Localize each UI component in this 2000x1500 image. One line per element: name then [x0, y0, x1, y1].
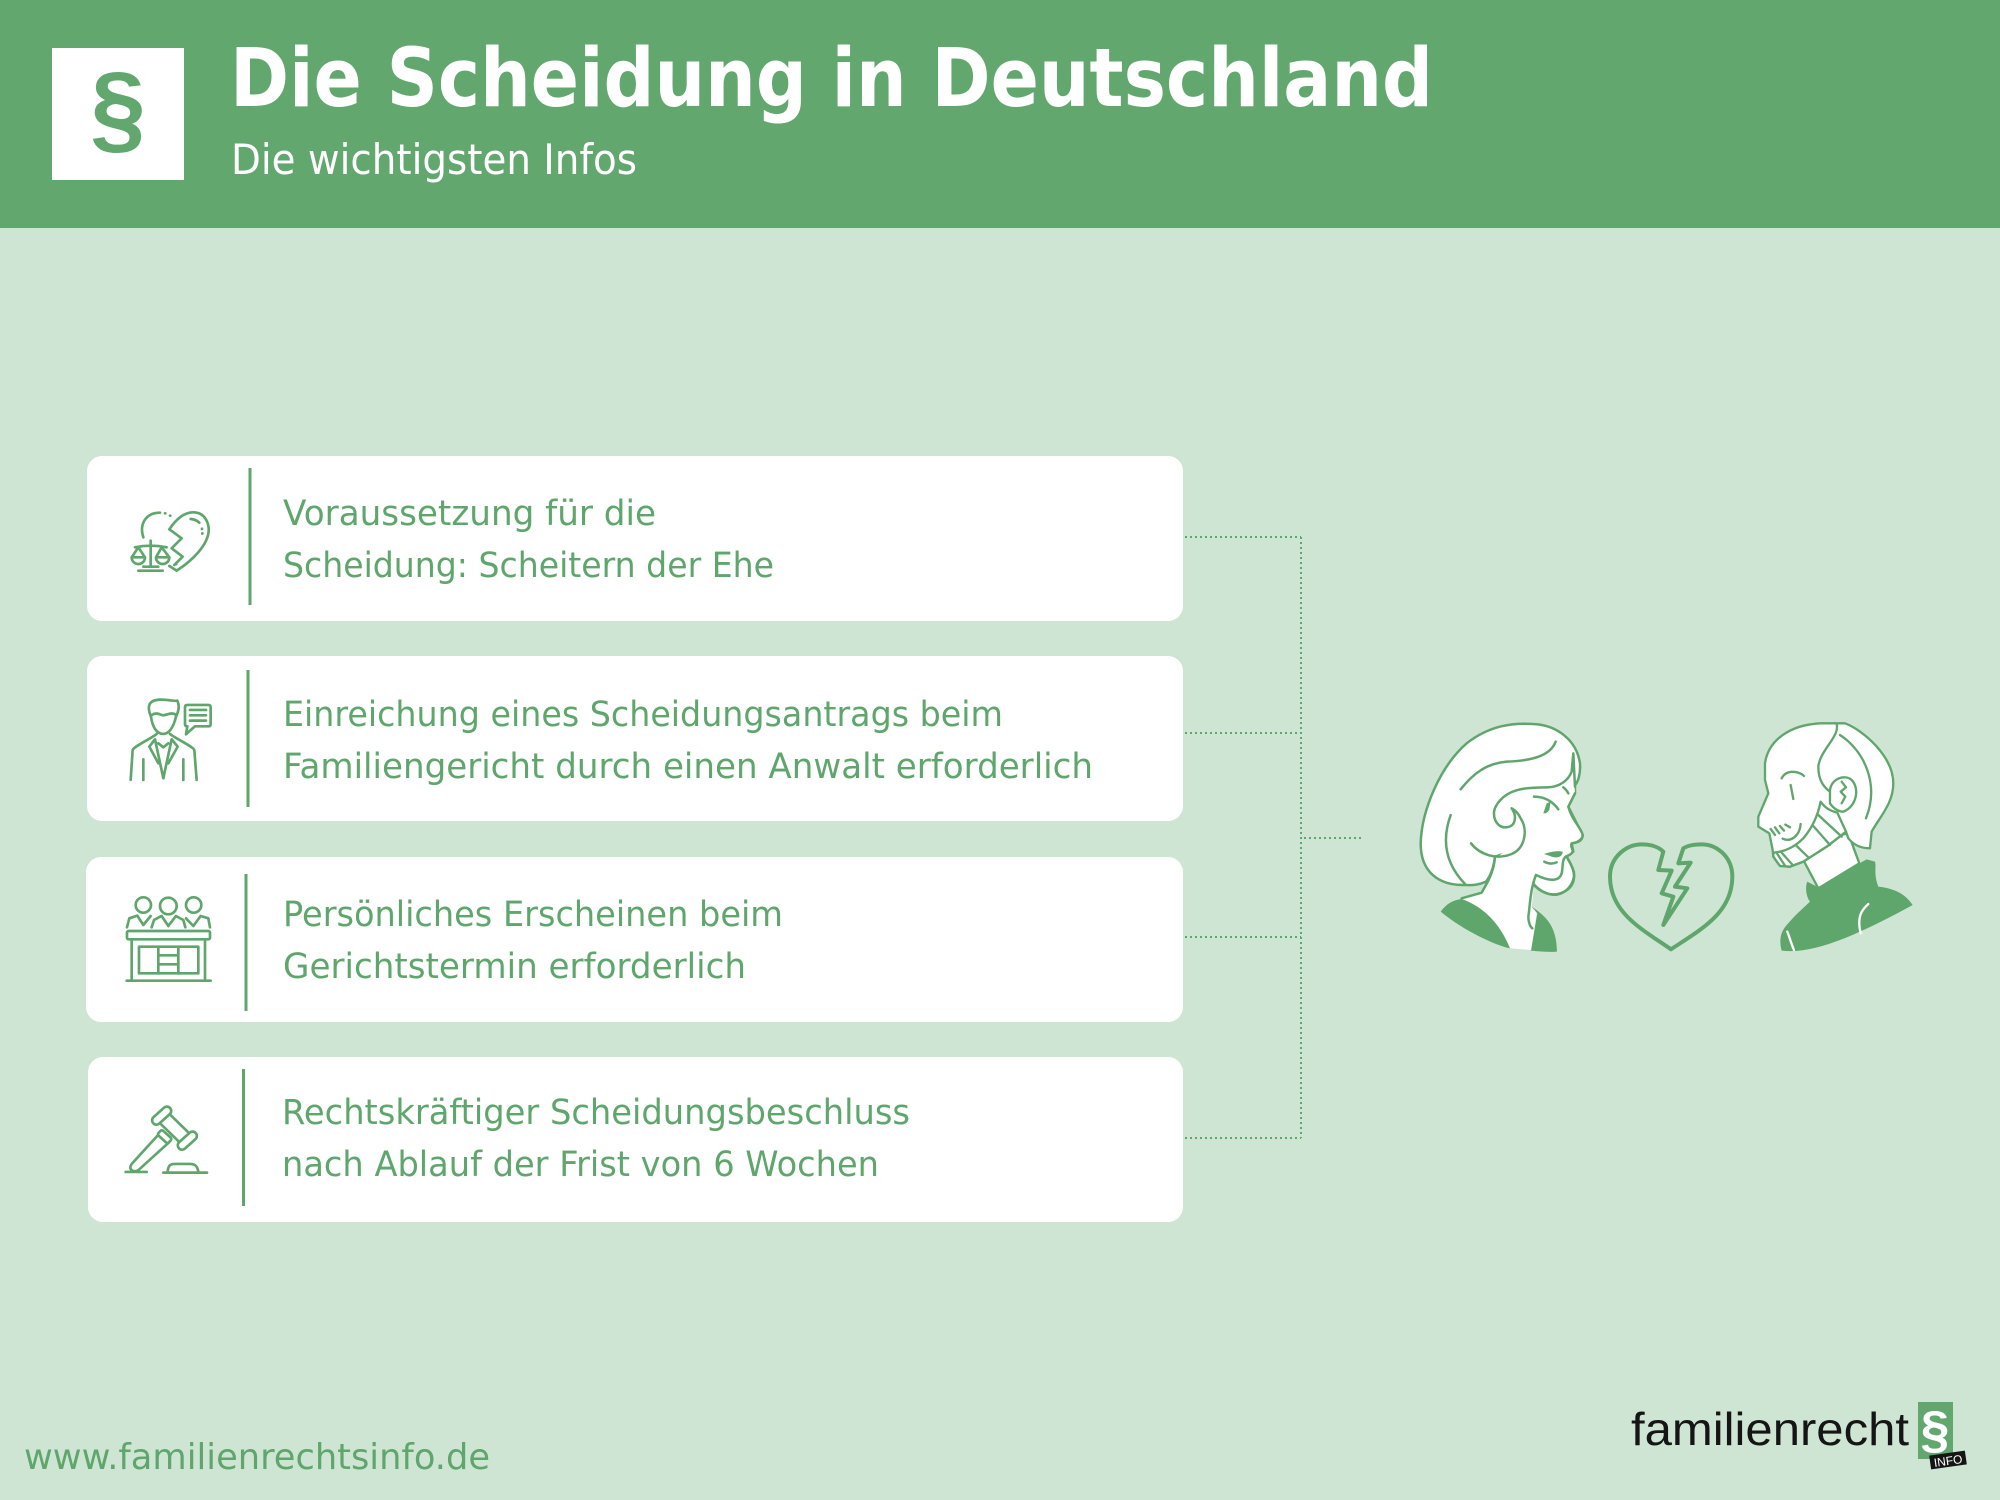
icon: broken heart [1610, 844, 1732, 949]
website url: www.familienrechtsinfo.de [24, 1437, 490, 1478]
text: final decree [282, 1093, 910, 1185]
icon: broken heart and scales [132, 512, 209, 571]
icon: gavel [126, 1105, 207, 1173]
panel: card 2 [87, 656, 1183, 821]
header banner [0, 0, 2000, 228]
subtitle: Die wichtigsten Infos [231, 135, 637, 184]
icon: court bench with judges [127, 897, 211, 981]
icon: paragraph symbol box: § [90, 52, 146, 164]
text: filing [283, 695, 1093, 787]
logo: familienrecht [1631, 1403, 1909, 1455]
text: personal appearance [283, 895, 783, 987]
logo [1631, 1401, 1967, 1470]
text: final decree: nach Ablauf der Frist von 6 Wochen [282, 1145, 879, 1185]
connector lines [1185, 537, 1364, 1138]
text: requirement [283, 494, 774, 586]
icon: lawyer with speech bubble [131, 700, 211, 780]
text: final decree: Rechtskräftiger Scheidungsbeschluss [282, 1093, 910, 1133]
text: requirement: Voraussetzung für die [283, 494, 656, 534]
illustration: man with beard [1758, 723, 1913, 951]
panel: card 4 [88, 1057, 1183, 1222]
text: filing: Familiengericht durch einen Anwalt erforderlich [283, 747, 1093, 787]
logo: INFO [1933, 1452, 1963, 1470]
text: personal appearance: Persönliches Erscheinen beim [283, 895, 783, 935]
panel: card 1 [87, 456, 1183, 621]
illustration: woman [1421, 724, 1583, 952]
icon: paragraph symbol box [52, 48, 184, 180]
logo: § [1921, 1401, 1949, 1459]
panel: card 3 [86, 857, 1183, 1022]
title: Die Scheidung in Deutschland [230, 32, 1433, 126]
text: personal appearance: Gerichtstermin erforderlich [283, 947, 746, 987]
text: requirement: Scheidung: Scheitern der Ehe [283, 546, 774, 586]
text: filing: Einreichung eines Scheidungsantrags beim [283, 695, 1003, 735]
